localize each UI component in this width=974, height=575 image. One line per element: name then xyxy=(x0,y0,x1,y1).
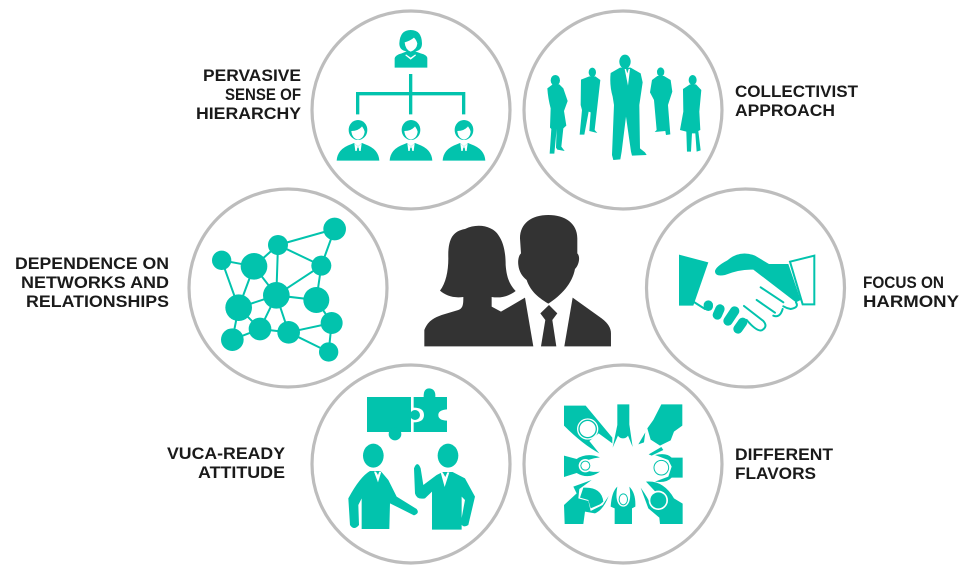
label: focus on harmony: HARMONY xyxy=(863,292,960,311)
ring: flavors xyxy=(524,365,722,563)
icon: two people with puzzle xyxy=(348,388,475,530)
icon: org chart xyxy=(337,30,485,161)
panel: flavors xyxy=(524,365,834,563)
label: vuca-ready attitude: VUCA-READY xyxy=(167,444,286,463)
panel: networks xyxy=(15,189,387,387)
label: focus on harmony: FOCUS ON xyxy=(863,273,944,292)
ring: hierarchy xyxy=(312,11,510,209)
ring: vuca xyxy=(312,365,510,563)
panel: vuca xyxy=(167,365,510,563)
label: dependence on networks and relationships: RELATIONSHIPS xyxy=(26,292,169,311)
label: vuca-ready attitude: ATTITUDE xyxy=(198,463,285,482)
panel: hierarchy xyxy=(196,11,510,209)
label: dependence on networks and relationships: NETWORKS AND xyxy=(21,273,169,292)
ring: collectivist xyxy=(524,11,722,209)
label: different flavors xyxy=(735,445,834,483)
panel: collectivist xyxy=(524,11,859,209)
icon: network graph xyxy=(212,218,346,362)
label: dependence on networks and relationships xyxy=(15,254,169,311)
label: collectivist approach: APPROACH xyxy=(735,101,835,120)
label: pervasive sense of hierarchy: SENSE OF xyxy=(225,85,301,104)
label: collectivist approach xyxy=(735,82,859,120)
icon: people in a circle from above xyxy=(564,404,683,524)
label: pervasive sense of hierarchy: HIERARCHY xyxy=(196,104,302,123)
label: different flavors: FLAVORS xyxy=(735,464,816,483)
icon: handshake xyxy=(679,253,814,330)
label: dependence on networks and relationships: DEPENDENCE ON xyxy=(15,254,169,273)
label: vuca-ready attitude xyxy=(167,444,286,482)
ring: networks xyxy=(189,189,387,387)
label: pervasive sense of hierarchy: PERVASIVE xyxy=(203,66,301,85)
label: pervasive sense of hierarchy xyxy=(196,66,302,123)
ring: harmony xyxy=(646,189,844,387)
panel: harmony xyxy=(646,189,960,387)
icon: group of people xyxy=(547,55,701,160)
label: collectivist approach: COLLECTIVIST xyxy=(735,82,859,101)
icon: central couple silhouette xyxy=(424,215,611,346)
label: focus on harmony xyxy=(863,273,960,311)
label: different flavors: DIFFERENT xyxy=(735,445,834,464)
